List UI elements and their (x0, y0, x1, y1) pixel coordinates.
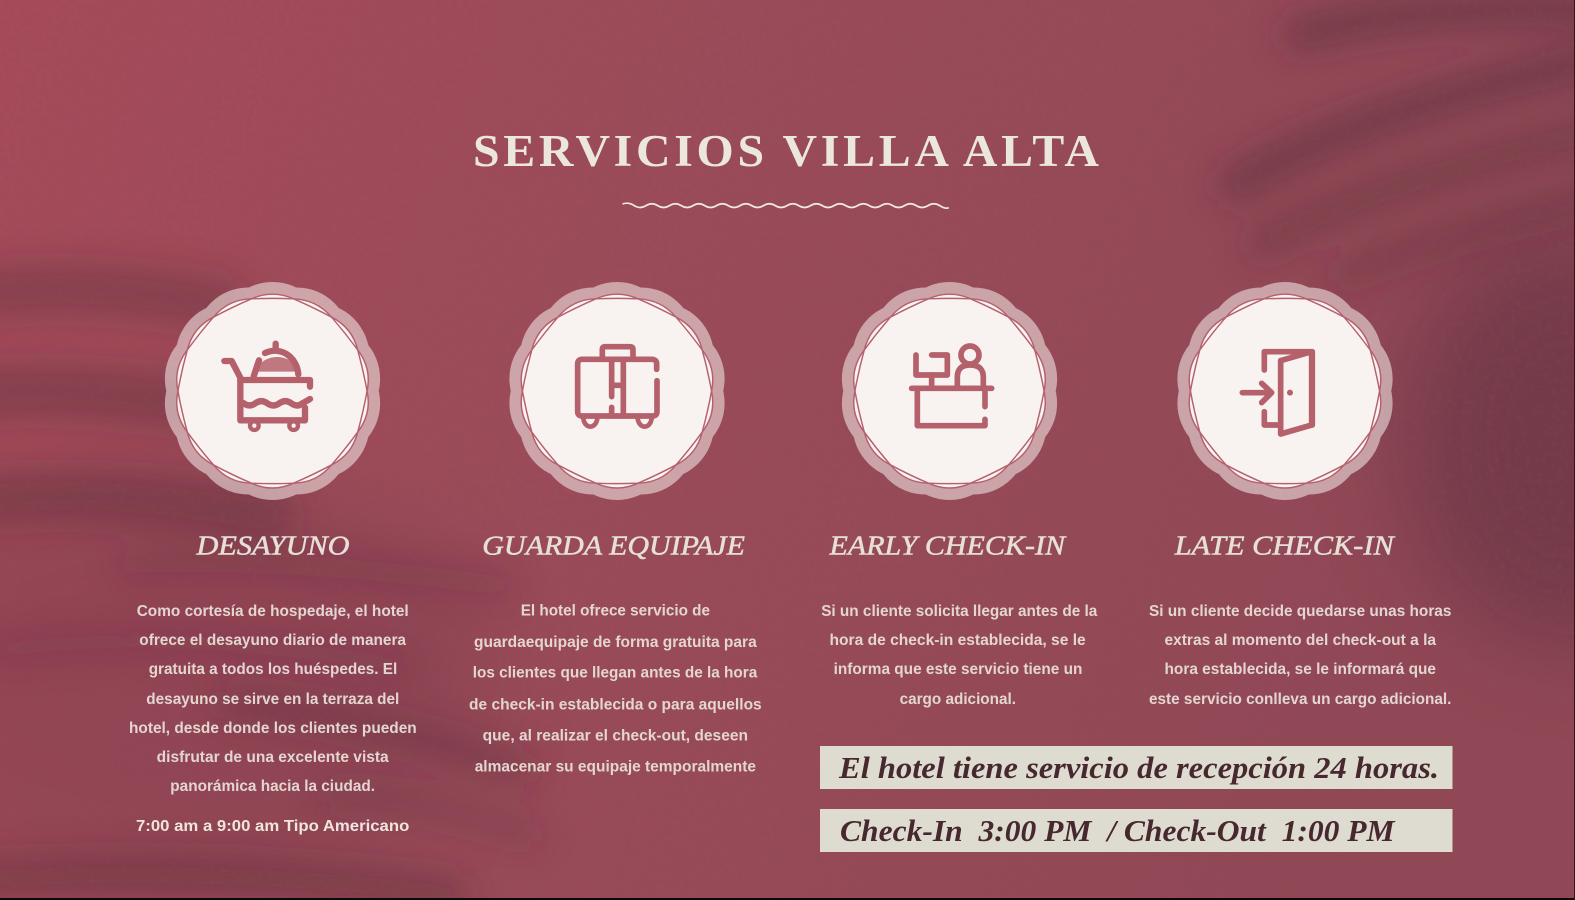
text block: desayuno description: desayuno se sirve en la terraza del (146, 691, 399, 708)
text block: guarda equipaje description: los clientes que llegan antes de la hora (473, 665, 758, 682)
icon badge: luggage (491, 262, 745, 516)
text block: desayuno description: gratuita a todos los huéspedes. El (149, 661, 397, 678)
heading: guarda equipaje: GUARDA EQUIPAJE (482, 529, 745, 560)
text block: breakfast hours: 7:00 am a 9:00 am Tipo Americano (136, 818, 409, 835)
text block: late check-in description: este servicio conlleva un cargo adicional. (1149, 691, 1451, 708)
decorative wavy divider under title (622, 203, 949, 208)
text block: late check-in description: hora establecida, se le informará que (1164, 661, 1436, 678)
text block: early check-in description: hora de check-in establecida, se le (830, 632, 1086, 649)
heading: late check-in: LATE CHECK-IN (1174, 529, 1396, 560)
icon badge: reception desk (823, 262, 1078, 516)
text block: desayuno description: Como cortesía de hospedaje, el hotel (137, 603, 409, 620)
text block: desayuno description: hotel, desde donde los clientes pueden (129, 720, 417, 737)
text block: early check-in description (821, 603, 1098, 708)
text block: late check-in description: extras al momento del check-out a la (1164, 632, 1436, 649)
text block: guarda equipaje description: guardaequipaje de forma gratuita para (474, 634, 757, 651)
text block: guarda equipaje description: que, al realizar el check-out, deseen (483, 728, 748, 744)
panel: desayuno (129, 262, 417, 835)
text block: early check-in description: Si un cliente solicita llegar antes de la (821, 603, 1098, 620)
heading: early check-in: EARLY CHECK-IN (828, 529, 1067, 560)
panel: late check-in (1149, 262, 1451, 708)
text block: guarda equipaje description (469, 603, 762, 776)
text block: desayuno description (129, 603, 417, 795)
text block: early check-in description: cargo adicional. (900, 691, 1016, 708)
text block: early check-in description: informa que este servicio tiene un (834, 661, 1082, 678)
text block: desayuno description: ofrece el desayuno diario de manera (139, 632, 406, 649)
callout: 24 hour reception: El hotel tiene servicio de recepción 24 horas. (838, 750, 1439, 785)
text block: late check-in description: Si un cliente decide quedarse unas horas (1149, 603, 1451, 620)
text block: guarda equipaje description: El hotel ofrece servicio de (521, 603, 710, 620)
text block: guarda equipaje description: de check-in establecida o para aquellos (469, 697, 762, 714)
icon badge: door with arrow (1159, 262, 1413, 516)
text block: desayuno description: disfrutar de una excelente vista (157, 749, 389, 766)
callout: check-in and check-out times: Check-In 3:00 PM / Check-Out 1:00 PM (840, 813, 1396, 848)
heading: desayuno: DESAYUNO (195, 529, 350, 560)
icon badge: breakfast cart (146, 262, 401, 516)
title: SERVICIOS VILLA ALTA (473, 126, 1099, 177)
text block: desayuno description: panorámica hacia la ciudad. (170, 778, 375, 795)
panel: early check-in (821, 262, 1098, 708)
text block: late check-in description (1149, 603, 1451, 708)
panel: guarda equipaje (469, 262, 762, 776)
text block: guarda equipaje description: almacenar su equipaje temporalmente (475, 759, 756, 776)
